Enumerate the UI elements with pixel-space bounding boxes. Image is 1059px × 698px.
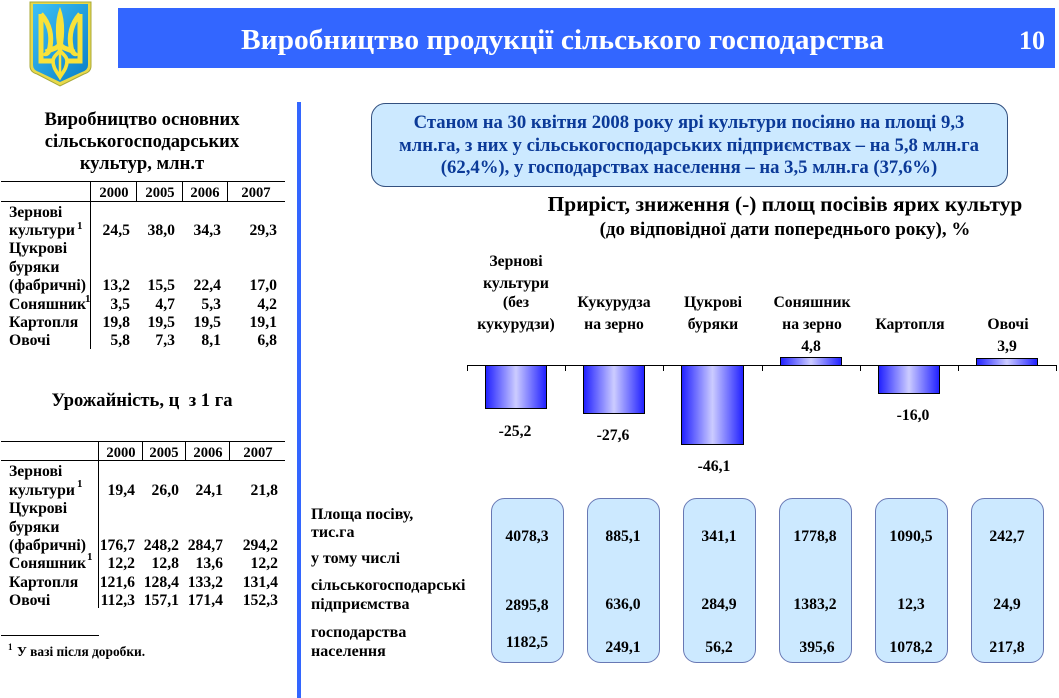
category labels: Цукрові: [684, 294, 743, 311]
footnote: 1: [8, 642, 13, 652]
callout: [372, 104, 1008, 186]
production table years: [99, 185, 271, 201]
bar values: 3,9: [997, 338, 1017, 355]
category labels: Картопля: [875, 316, 945, 333]
yield table values: 171,4: [188, 592, 223, 609]
production table values: 34,3: [194, 222, 221, 239]
yield table values: 19,4: [108, 482, 135, 499]
yield table years: 2005: [149, 445, 179, 461]
production table row labels: 1: [77, 220, 82, 232]
header banner: [118, 8, 1055, 68]
production table values: 4,7: [155, 296, 175, 313]
yield table values: 152,3: [243, 592, 278, 609]
production table row labels: Цукрові: [9, 240, 68, 257]
bar values: -25,2: [499, 423, 531, 440]
bar chart: [468, 253, 1056, 475]
production table grid: [1, 181, 285, 349]
yield table values: 284,7: [188, 537, 223, 554]
category labels: на зерно: [584, 316, 644, 333]
yield table values: 12,2: [108, 555, 135, 572]
row labels: Площа посіву,: [311, 506, 413, 523]
yield table values: 21,8: [251, 482, 278, 499]
data cards: [492, 498, 1044, 662]
yield table values: 176,7: [100, 537, 135, 554]
vertical divider: [297, 102, 301, 698]
production table values: 3,5: [110, 296, 130, 313]
production table values: 5,8: [110, 332, 130, 349]
yield table values: 248,2: [144, 537, 179, 554]
category labels: буряки: [688, 316, 738, 333]
bar values: [499, 338, 1017, 475]
bar values: -27,6: [597, 427, 629, 444]
bar values: 4,8: [801, 338, 821, 355]
heading: yield: Урожайність, ц з 1 га: [52, 390, 233, 411]
yield table values: 12,8: [152, 555, 179, 572]
production table values: 22,4: [194, 277, 221, 294]
category labels: Кукурудза: [577, 294, 651, 311]
card values: 1182,5: [506, 634, 548, 651]
heading: production: сільськогосподарських: [45, 131, 240, 152]
category labels: на зерно: [782, 316, 842, 333]
production table years: 2005: [145, 185, 175, 201]
category labels: Соняшник: [773, 294, 851, 311]
category labels: кукурудзи): [477, 316, 555, 333]
card values: 1090,5: [889, 528, 933, 545]
production table row labels: [9, 204, 90, 349]
yield table values: 128,4: [144, 574, 179, 591]
category labels: Зернові: [489, 253, 543, 270]
yield table values: 121,6: [100, 574, 135, 591]
card values: 1778,8: [793, 528, 837, 545]
panel: production table: [1, 109, 285, 349]
yield table row labels: Соняшник: [9, 555, 87, 572]
yield table values: 26,0: [152, 482, 179, 499]
card values: 1078,2: [889, 639, 933, 656]
production table values: 38,0: [148, 222, 175, 239]
yield table row labels: [9, 463, 92, 609]
production table row labels: буряки: [9, 259, 59, 276]
heading: production: [44, 109, 240, 174]
category labels: (без: [503, 294, 529, 311]
card values: 1383,2: [793, 596, 837, 613]
production table values: 5,3: [201, 296, 221, 313]
production table values: 4,2: [257, 296, 277, 313]
card values: 885,1: [605, 528, 641, 545]
production table values: 19,5: [194, 314, 221, 331]
production table values: 19,5: [148, 314, 175, 331]
production table row labels: (фабричні): [9, 277, 86, 294]
icon: coat of arms of Ukraine: [30, 2, 91, 86]
title: Виробництво продукції сільського господарства: [241, 25, 884, 56]
yield table values: 112,3: [101, 592, 135, 609]
yield table values: 133,2: [188, 574, 223, 591]
yield table values: 157,1: [144, 592, 179, 609]
production table years: 2000: [99, 185, 129, 201]
yield table years: [106, 445, 273, 461]
heading: production: Виробництво основних: [44, 109, 240, 130]
yield table row labels: буряки: [9, 519, 59, 536]
yield table row labels: культури: [9, 482, 75, 499]
production table values: 13,2: [103, 277, 130, 294]
card values: 249,1: [605, 639, 641, 656]
category labels: [477, 253, 1029, 333]
production table row labels: Овочі: [9, 332, 51, 349]
production table years: 2006: [190, 185, 220, 201]
production table row labels: Соняшник: [9, 296, 87, 313]
yield table values: [100, 482, 278, 609]
production table row labels: 1: [85, 293, 90, 305]
axis: [468, 365, 1056, 371]
card values: 24,9: [993, 596, 1021, 613]
yield table values: 294,2: [243, 537, 278, 554]
yield table row labels: Зернові: [9, 463, 63, 480]
production table values: 8,1: [201, 332, 221, 349]
row labels: у тому числі: [311, 550, 401, 567]
yield table row labels: 1: [77, 478, 82, 490]
footnote: У вазі після доробки.: [17, 644, 145, 659]
panel: yield table: [1, 390, 285, 609]
row labels: підприємства: [311, 596, 410, 613]
production table values: 6,8: [257, 332, 277, 349]
production table values: 7,3: [155, 332, 175, 349]
yield table years: 2007: [243, 445, 273, 461]
yield table values: 131,4: [243, 574, 278, 591]
production table values: 17,0: [250, 277, 277, 294]
production table values: 19,8: [103, 314, 130, 331]
row labels: тис.га: [311, 524, 354, 541]
yield table row labels: (фабричні): [9, 537, 86, 554]
card values: 12,3: [897, 596, 925, 613]
chart heading: Приріст, зниження (-) площ посівів ярих культур: [548, 192, 1022, 216]
production table values: 29,3: [250, 222, 277, 239]
card values: 56,2: [705, 639, 733, 656]
card values: 284,9: [701, 596, 737, 613]
card values: [505, 528, 1025, 656]
yield table years: 2000: [106, 445, 136, 461]
callout: млн.га, з них у сільськогосподарських підприємствах – на 5,8 млн.га: [399, 135, 980, 156]
row labels: населення: [311, 643, 386, 660]
yield table grid: [1, 441, 285, 608]
yield table row labels: Овочі: [9, 592, 51, 609]
card values: 636,0: [605, 596, 641, 613]
callout: Станом на 30 квітня 2008 року ярі культури посіяно на площі 9,3: [414, 112, 964, 133]
category labels: культури: [483, 275, 549, 292]
bar values: -16,0: [897, 407, 929, 424]
chart heading: (до відповідної дати попереднього року), %: [600, 219, 970, 240]
chart heading: [548, 192, 1022, 240]
production table values: [103, 222, 277, 349]
yield table row labels: Картопля: [9, 574, 79, 591]
card values: 4078,3: [505, 528, 549, 545]
production table row labels: Картопля: [9, 314, 79, 331]
page number: 10: [1019, 26, 1045, 55]
yield table years: 2006: [193, 445, 223, 461]
bar values: -46,1: [698, 458, 730, 475]
row labels: [311, 506, 466, 660]
bars: [486, 358, 1038, 444]
footnote: [1, 636, 145, 659]
production table row labels: культури: [9, 222, 75, 239]
row labels: сільськогосподарські: [311, 577, 466, 594]
callout: (62,4%), у господарствах населення – на 3,5 млн.га (37,6%): [441, 157, 937, 178]
production table values: 24,5: [103, 222, 130, 239]
production table years: 2007: [241, 185, 271, 201]
card values: 341,1: [701, 528, 737, 545]
production table values: 19,1: [250, 314, 277, 331]
card values: 217,8: [989, 639, 1025, 656]
category labels: Овочі: [987, 316, 1029, 333]
yield table values: 12,2: [251, 555, 278, 572]
yield table row labels: Цукрові: [9, 500, 68, 517]
card values: 395,6: [799, 639, 835, 656]
yield table values: 13,6: [196, 555, 223, 572]
card values: 2895,8: [505, 597, 549, 614]
production table row labels: Зернові: [9, 204, 63, 221]
yield table row labels: 1: [87, 551, 92, 563]
production table values: 15,5: [148, 277, 175, 294]
row labels: господарства: [311, 624, 406, 641]
card values: 242,7: [989, 528, 1025, 545]
yield table values: 24,1: [196, 482, 223, 499]
heading: production: культур, млн.т: [80, 153, 204, 174]
